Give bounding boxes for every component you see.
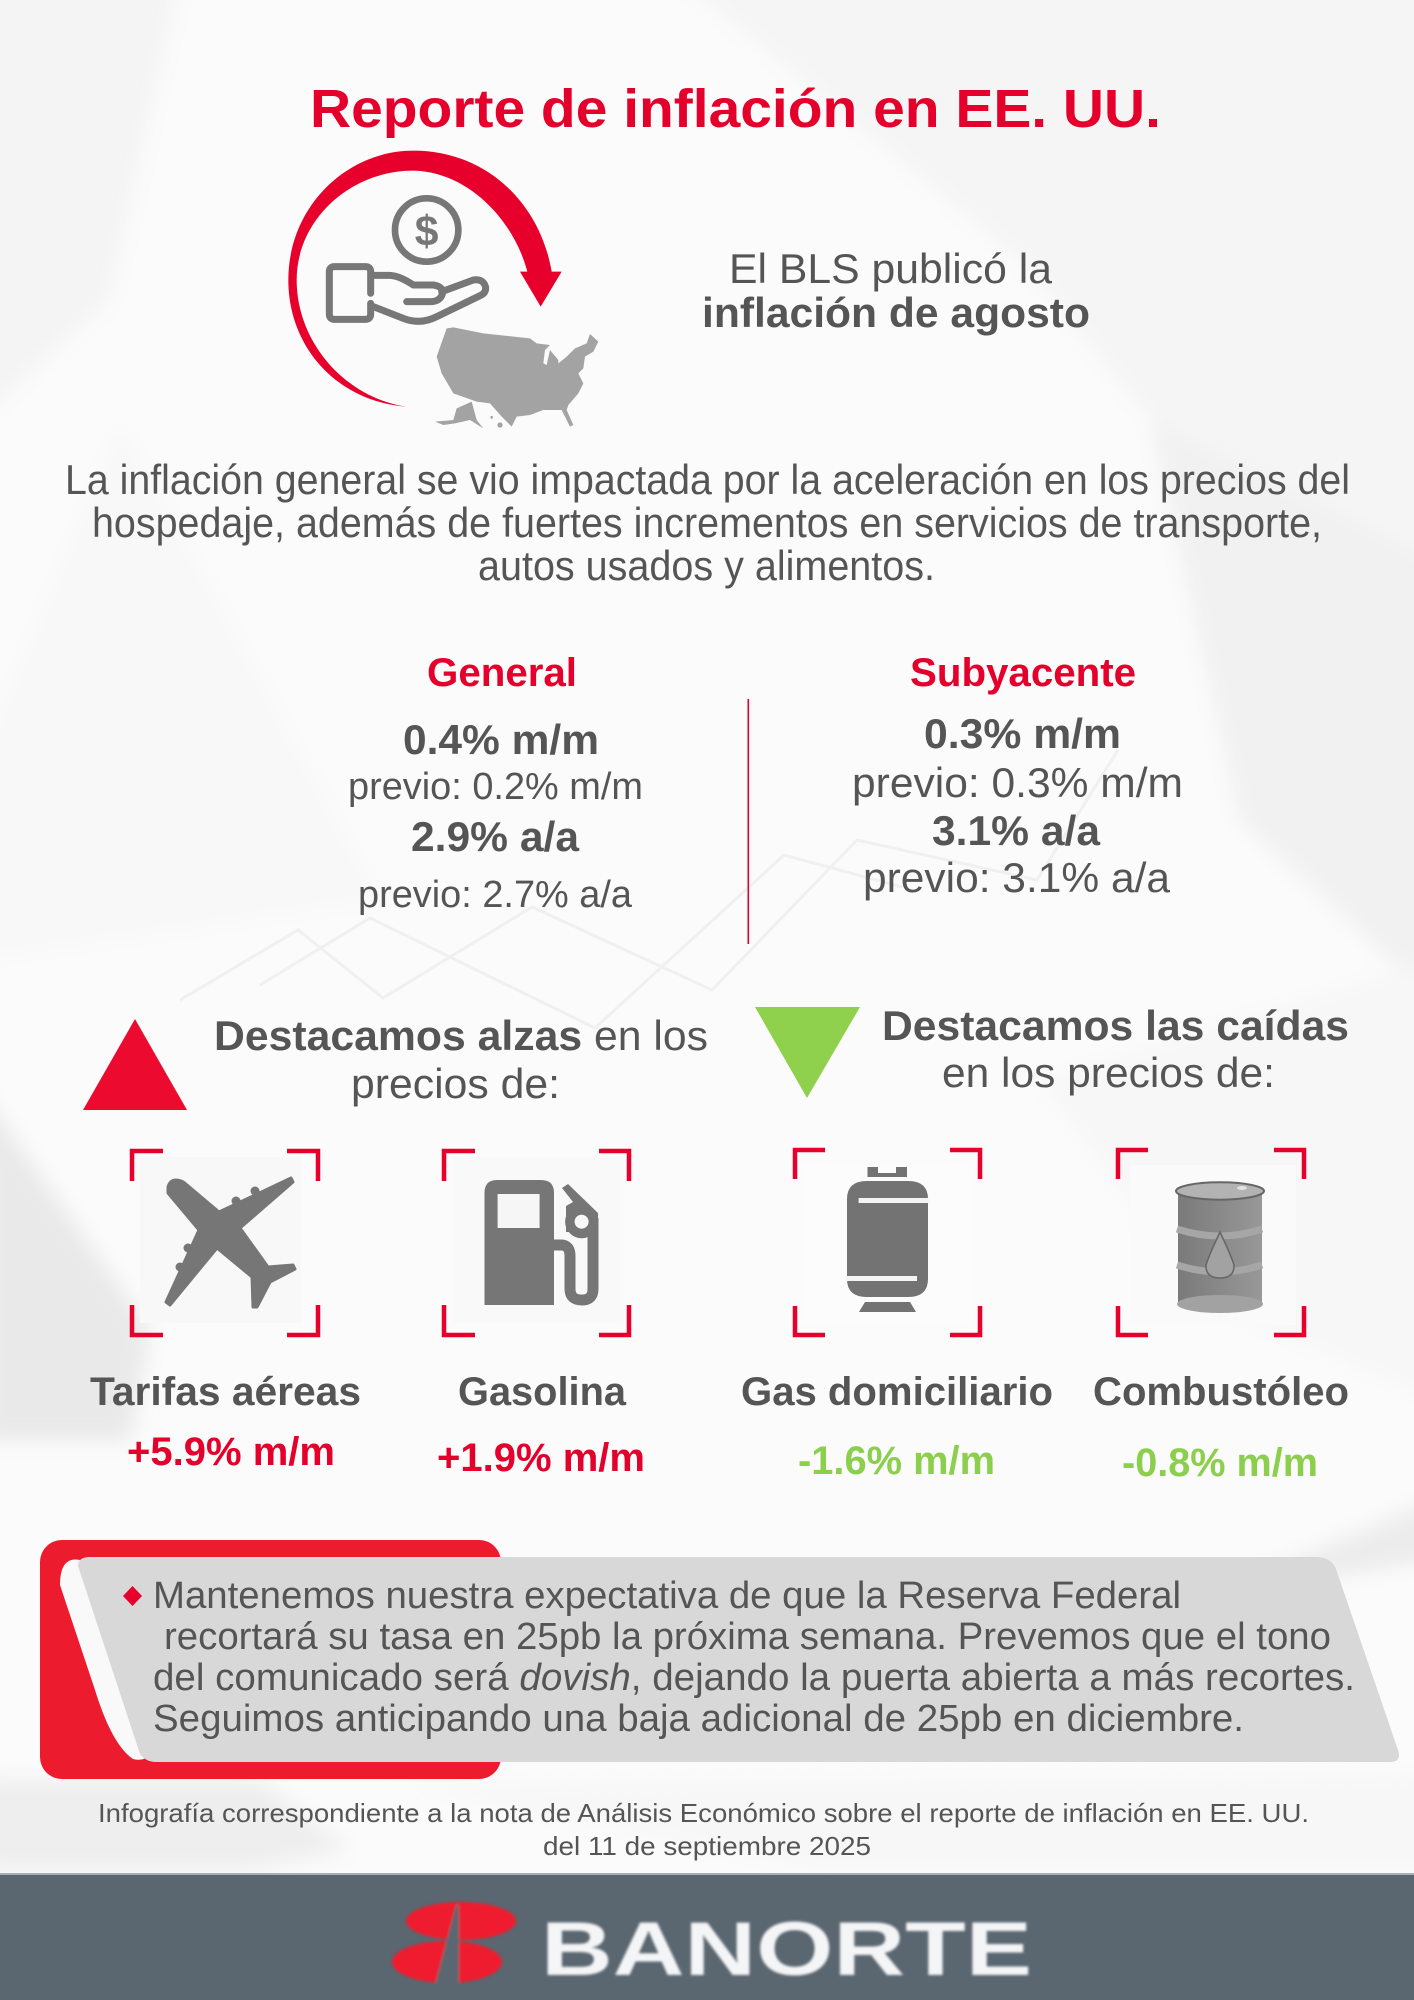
heading: price increases: Destacamos alzas en los [214,1012,708,1059]
callout: Federal Reserve expectation [40,1540,1399,1779]
summary paragraph: autos usados y alimentos. [478,542,935,589]
intro text: El BLS publicó la [729,245,1053,292]
panel: general inflation: previo: 0.2% m/m [348,766,643,808]
panel: core inflation [852,651,1183,901]
icon: coin: $ [415,207,439,255]
logo: Banorte wordmark: BANORTE [541,1907,1032,1992]
item: fuel oil [1093,1150,1349,1485]
heading: price increases [214,1012,708,1107]
source note: del 11 de septiembre 2025 [543,1831,871,1861]
panel: general inflation: 2.9% a/a [411,813,580,860]
panel: general inflation: previo: 2.7% a/a [358,874,633,916]
item: airfares: +5.9% m/m [127,1430,335,1474]
heading: price decreases: en los precios de: [942,1049,1275,1096]
item: gasoline: Gasolina [458,1370,627,1414]
icon: curved red arrow [288,151,562,407]
icon: fuel pump [484,1180,598,1305]
icon: gas cylinder [846,1167,929,1312]
icon: green down triangle [755,1007,860,1098]
panel: general inflation: 0.4% m/m [403,716,599,763]
icon: US map [435,327,598,428]
panel: core inflation: Subyacente [910,651,1136,695]
summary paragraph: La inflación general se vio impactada por la aceleración en los precios del [65,456,1350,503]
logo: Banorte symbol [392,1902,516,1985]
callout red backing [40,1540,501,1779]
panel: general inflation: General [427,651,577,695]
source note [98,1798,1309,1861]
panel: core inflation: previo: 0.3% m/m [852,759,1183,806]
icon: red up triangle [83,1019,187,1110]
callout text: Seguimos anticipando una baja adicional de 25pb en diciembre. [153,1698,1244,1740]
callout bullet [123,1586,142,1606]
source note: Infografía correspondiente a la nota de Análisis Económico sobre el reporte de inflación en EE. UU. [98,1798,1309,1828]
item: airfares [90,1151,361,1474]
callout text: del comunicado será dovish, dejando la puerta abierta a más recortes. [153,1657,1355,1699]
heading: price decreases [882,1002,1349,1096]
panel: core inflation: previo: 3.1% a/a [863,854,1171,901]
intro text [702,245,1090,336]
panel: core inflation: 0.3% m/m [924,710,1121,757]
footer bar [0,1873,1414,2000]
icon: hand with coin, arrow and US map [288,151,598,428]
item: domestic gas: -1.6% m/m [798,1439,995,1483]
heading: price increases: precios de: [351,1060,560,1107]
item: gasoline [437,1151,645,1480]
summary paragraph: hospedaje, además de fuertes incrementos en servicios de transporte, [92,499,1322,546]
callout grey panel [78,1557,1399,1762]
item: fuel oil: Combustóleo [1093,1370,1349,1414]
icon: open hand [329,267,486,321]
panel: core inflation: 3.1% a/a [932,807,1101,854]
summary paragraph [65,456,1350,589]
icon: coin [395,198,458,262]
item: domestic gas: Gas domiciliario [741,1370,1053,1414]
item: fuel oil: -0.8% m/m [1122,1441,1318,1485]
callout text: Mantenemos nuestra expectativa de que la Reserva Federal [153,1575,1181,1617]
callout text: recortará su tasa en 25pb la próxima semana. Prevemos que el tono [164,1616,1331,1658]
item: airfares: Tarifas aéreas [90,1370,361,1414]
icon: oil barrel [1176,1182,1264,1313]
heading: price decreases: Destacamos las caídas [882,1002,1349,1049]
item: gasoline: +1.9% m/m [437,1436,645,1480]
panel: general inflation [348,651,643,916]
callout text [153,1575,1355,1740]
intro text: inflación de agosto [702,289,1090,336]
icon: airplane [166,1178,295,1307]
callout white strip [60,1560,146,1760]
title: Reporte de inflación en EE. UU. [310,79,1161,139]
item: domestic gas [741,1150,1053,1483]
